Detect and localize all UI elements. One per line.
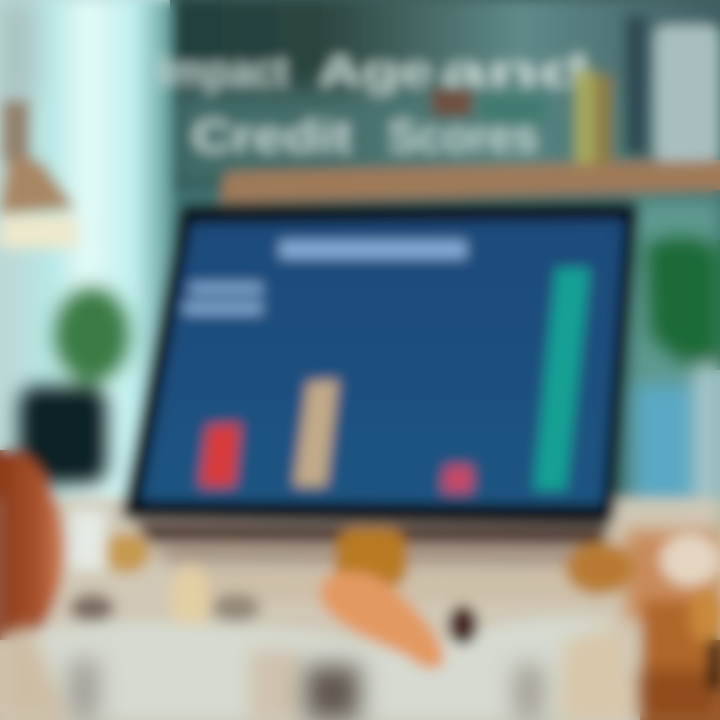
bar chart: [200, 268, 590, 492]
laptop shadow: [135, 524, 610, 565]
wooden shelf: [220, 160, 720, 202]
chart legend: [184, 283, 262, 314]
plant left: [18, 287, 130, 485]
lower background and desk: [0, 498, 720, 720]
hand: [320, 572, 445, 669]
chart title: [280, 241, 466, 258]
wall sign: title: [158, 47, 590, 162]
keyboard and coins: [70, 510, 634, 632]
sleeve tan edges: [0, 625, 635, 720]
sleeve: [0, 618, 640, 720]
shelf objects: [432, 15, 720, 170]
wall sign: title: Credit: [192, 110, 352, 162]
wall sign: title: Impact: [158, 47, 288, 96]
left arm: [0, 449, 64, 640]
right table items: [660, 534, 720, 586]
wall sign: title: Age: [318, 47, 433, 96]
wall sign: title: Scores: [388, 110, 538, 162]
laptop bezel: [122, 202, 639, 526]
dark gap: [448, 605, 478, 645]
window light: [0, 0, 172, 520]
plant right: [635, 236, 720, 520]
pendant lamp: [0, 100, 78, 248]
sleeve folds: [70, 660, 543, 720]
wall sign: title: and: [440, 47, 590, 96]
laptop screen: [142, 220, 624, 504]
hands and sleeves: [0, 449, 720, 720]
laptop: [122, 202, 639, 526]
